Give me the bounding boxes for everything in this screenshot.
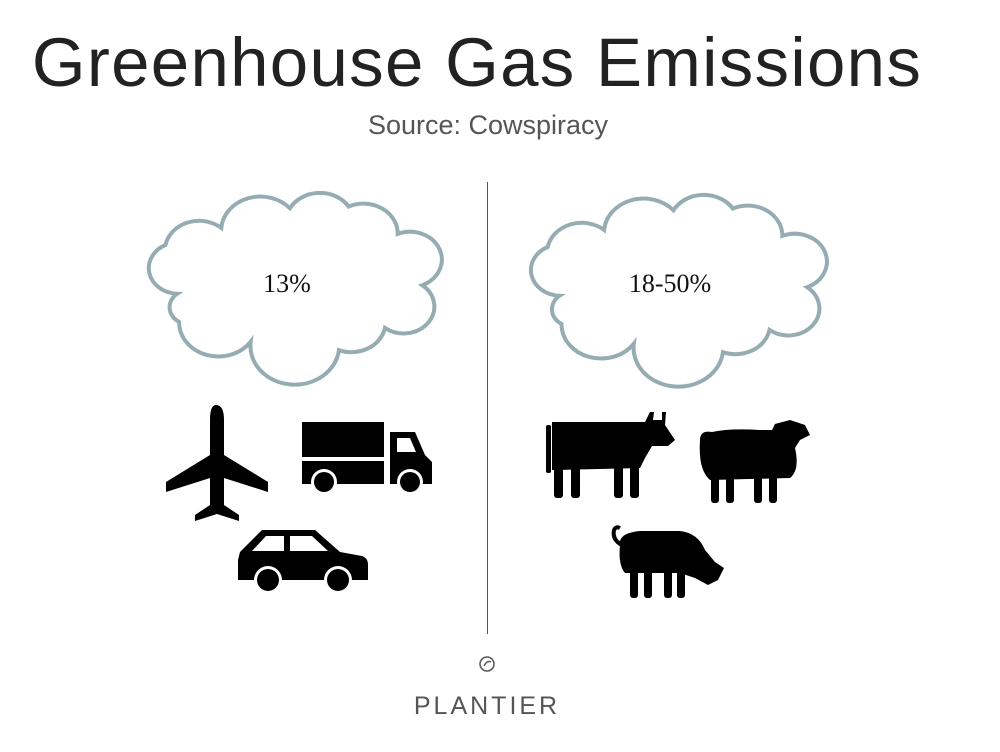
cloud: right 18-50% — [531, 195, 827, 387]
divider — [487, 182, 488, 634]
icon: cow — [546, 412, 675, 498]
title: Greenhouse Gas Emissions — [32, 24, 922, 101]
logo icon — [480, 657, 494, 671]
logo text: PLANTIER — [414, 692, 560, 720]
icon: truck — [302, 422, 432, 495]
subtitle: Source: Cowspiracy — [368, 110, 608, 140]
icon: airplane — [166, 405, 268, 521]
icon: car — [238, 530, 368, 594]
cloud: left 13%: 13% — [263, 269, 311, 298]
cloud: right 18-50%: 18-50% — [629, 269, 711, 298]
icon: sheep — [700, 420, 810, 503]
cloud: left 13% — [149, 193, 442, 385]
icon: pig — [614, 527, 724, 598]
